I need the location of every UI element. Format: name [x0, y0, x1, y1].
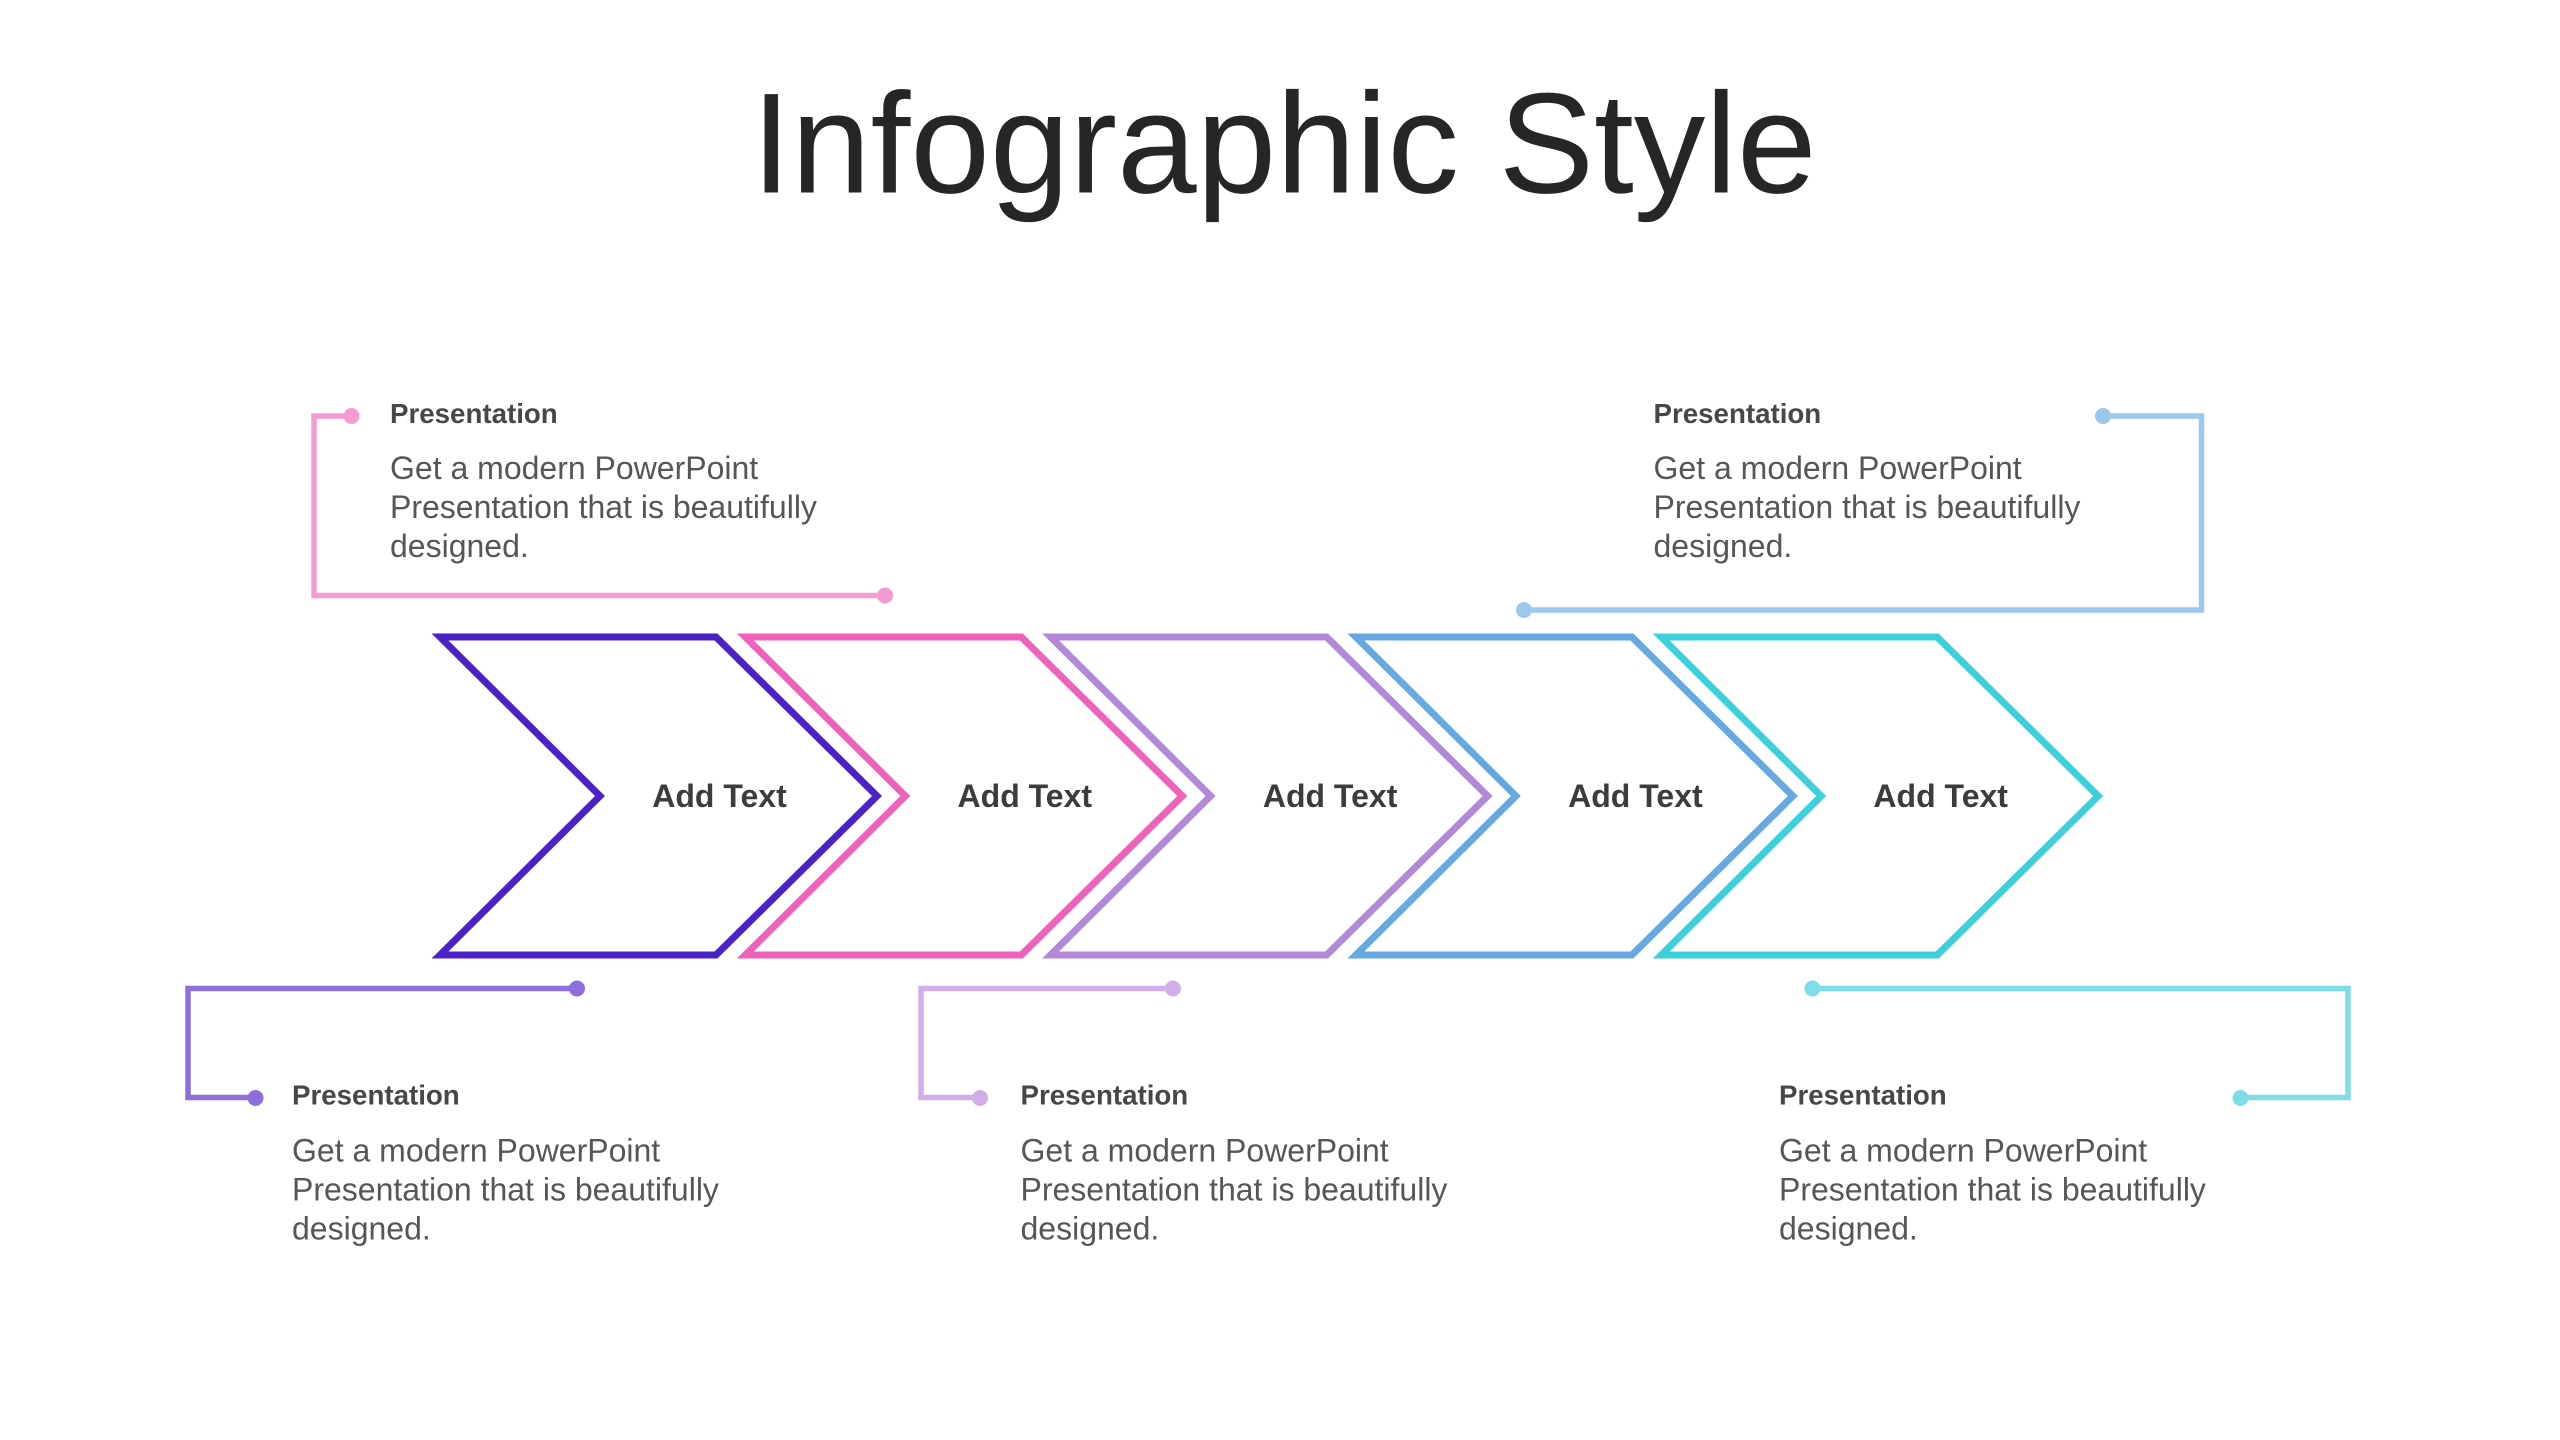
title: Infographic Style [751, 64, 1817, 224]
text block: top left: designed. [390, 528, 529, 564]
text block: bottom left [292, 1080, 719, 1246]
text block: top right: Get a modern PowerPoint [1654, 450, 2022, 486]
text block: top left: Presentation that is beautifully [390, 489, 817, 525]
text block: bottom middle: Presentation [1020, 1080, 1188, 1110]
callout: bottom right (cyan) [1779, 980, 2348, 1246]
text block: bottom left: Presentation [292, 1080, 460, 1110]
chevron 3: purple [1051, 637, 1488, 955]
text block: bottom middle: Presentation that is beautifully [1020, 1172, 1447, 1208]
chevron 4: blue: Add Text [1568, 778, 1703, 814]
callout: top left (pink) [314, 398, 893, 604]
text block: top right: designed. [1654, 528, 1792, 564]
text block: top left: Presentation [390, 398, 558, 429]
text block: bottom right: Presentation that is beautifully [1779, 1172, 2206, 1208]
connector: pink bracket [314, 408, 893, 604]
text block: top left: Get a modern PowerPoint [390, 450, 758, 486]
text block: bottom middle: Get a modern PowerPoint [1020, 1132, 1389, 1168]
text block: bottom left: Get a modern PowerPoint [292, 1132, 660, 1168]
chevron 1: indigo: Add Text [652, 778, 787, 814]
connector: cyan bracket [1804, 980, 2348, 1106]
text block: bottom middle: designed. [1020, 1210, 1159, 1246]
text block: bottom right: Presentation [1779, 1080, 1947, 1110]
chevron 4: blue [1356, 637, 1793, 955]
text block: top right: Presentation [1654, 398, 1821, 429]
callout: bottom middle (lilac) [921, 980, 1447, 1246]
callout: bottom left (violet) [188, 980, 719, 1246]
chevron 2: pink: Add Text [958, 778, 1092, 814]
callout: top right (blue) [1516, 398, 2202, 618]
text block: bottom left: Presentation that is beautifully [292, 1172, 719, 1208]
chevron 5: cyan: Add Text [1873, 778, 2008, 814]
text block: top left [390, 398, 817, 564]
text block: bottom right: designed. [1779, 1210, 1918, 1246]
connector: violet bracket [188, 980, 585, 1106]
chevron 5: cyan [1661, 637, 2098, 955]
chevron 1: indigo [440, 637, 877, 955]
text block: bottom right: Get a modern PowerPoint [1779, 1132, 2147, 1168]
text block: bottom left: designed. [292, 1210, 431, 1246]
connector: lilac bracket [921, 980, 1181, 1106]
text block: top right: Presentation that is beautifully [1654, 489, 2080, 525]
connector: blue bracket [1516, 408, 2202, 618]
chevron 2: pink [745, 637, 1182, 955]
chevron 3: purple: Add Text [1263, 778, 1398, 814]
text block: top right [1654, 398, 2080, 564]
chevron process row [440, 637, 2098, 955]
text block: bottom right [1779, 1080, 2206, 1246]
text block: bottom middle [1020, 1080, 1447, 1246]
